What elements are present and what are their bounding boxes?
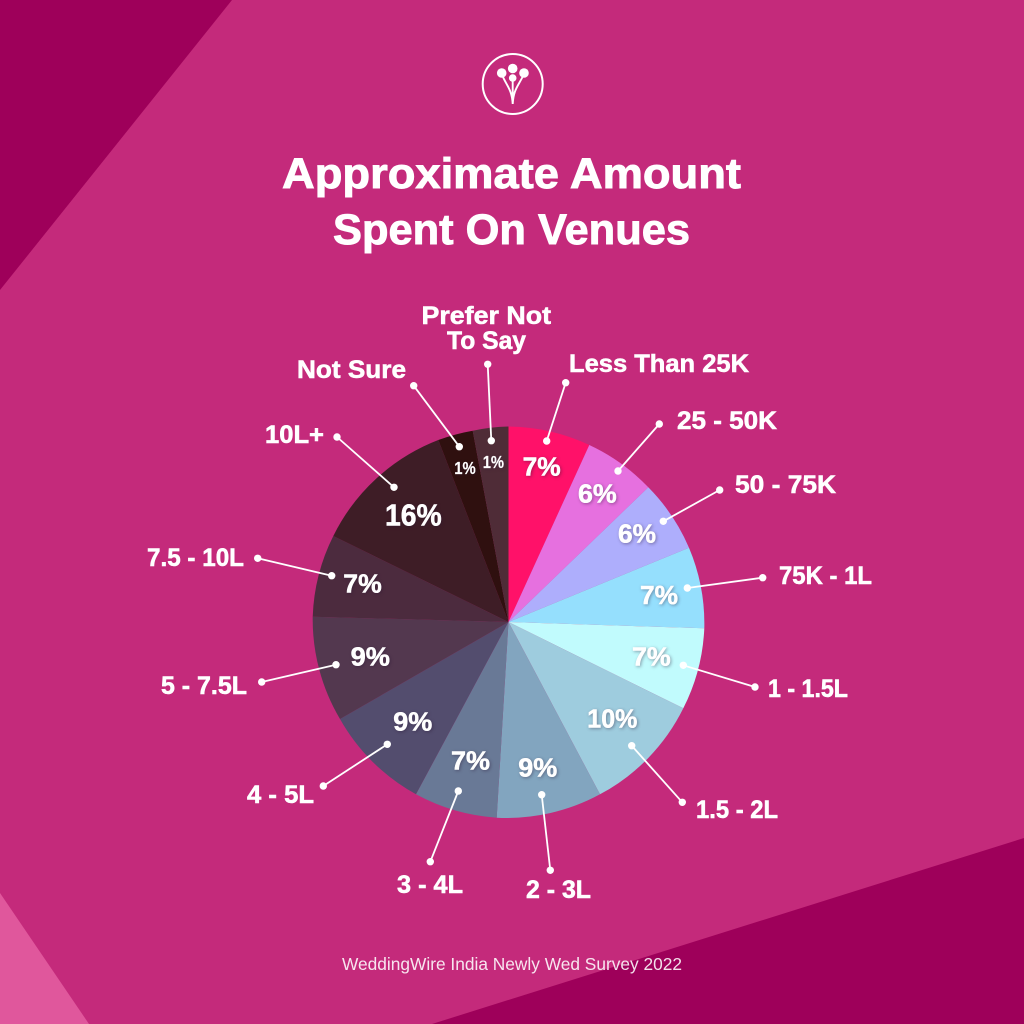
percent labels: 9%: [393, 707, 432, 737]
title: [282, 150, 741, 254]
callout: 50 - 75K: [660, 471, 836, 525]
percent labels: 16%: [385, 498, 442, 533]
percent labels: 6%: [578, 479, 617, 509]
callout: Prefer Not To Say: [422, 302, 552, 444]
slice: 4 - 5L: [340, 622, 508, 794]
percent labels: 1%: [483, 452, 504, 472]
callout: 50 - 75K: 50 - 75K: [735, 471, 836, 499]
percent labels: 7%: [632, 642, 671, 672]
callout: 5 - 7.5L: [161, 661, 340, 700]
callout: Prefer Not To Say: Prefer Not: [422, 302, 552, 330]
slice: Not Sure: [438, 431, 508, 622]
callout: 7.5 - 10L: [147, 544, 335, 579]
slice: 5 - 7.5L: [313, 617, 508, 719]
title: Approximate Amount: [282, 150, 741, 198]
percent labels: 6%: [618, 519, 656, 549]
callout: 4 - 5L: [247, 741, 391, 809]
callout: 1.5 - 2L: [628, 742, 778, 824]
callout: 4 - 5L: 4 - 5L: [247, 781, 314, 809]
title: Spent On Venues: [333, 206, 690, 254]
footer source text: WeddingWire India Newly Wed Survey 2022: [342, 954, 682, 974]
callout: Not Sure: Not Sure: [297, 356, 406, 384]
slice: 3 - 4L: [416, 622, 508, 818]
slice: 7.5 - 10L: [313, 536, 508, 622]
callout: 7.5 - 10L: 7.5 - 10L: [147, 544, 244, 572]
callout: Not Sure: [297, 356, 463, 450]
callout: 10L+: 10L+: [265, 421, 324, 449]
callout: 25 - 50K: 25 - 50K: [677, 407, 777, 435]
callout: Less Than 25K: [543, 350, 749, 445]
callout: 10L+: [265, 421, 398, 491]
callout: 75K - 1L: [684, 562, 872, 592]
background shape: top-left dark corner: [0, 0, 232, 290]
background shape: bottom-left light corner: [0, 893, 89, 1024]
slice: 25 - 50K: [508, 445, 648, 622]
slice: 50 - 75K: [508, 487, 689, 622]
percent labels: 9%: [518, 753, 557, 783]
callout: Prefer Not To Say: To Say: [447, 327, 526, 355]
callout: 5 - 7.5L: 5 - 7.5L: [161, 672, 247, 700]
callout: 3 - 4L: 3 - 4L: [397, 871, 463, 899]
slice: Less Than 25K: [508, 426, 589, 622]
percent labels: 7%: [451, 745, 490, 775]
callout: 2 - 3L: [526, 791, 591, 904]
percent labels: [343, 452, 678, 783]
percent labels: 10%: [587, 704, 637, 734]
callout: 1.5 - 2L: 1.5 - 2L: [696, 796, 778, 824]
callout: 1 - 1.5L: [680, 662, 848, 703]
callout: 1 - 1.5L: 1 - 1.5L: [768, 675, 848, 703]
callout: 3 - 4L: [397, 787, 463, 899]
percent labels: 7%: [640, 580, 678, 610]
slice: Prefer Not To Say: [473, 426, 508, 622]
slice: 75K - 1L: [508, 548, 704, 628]
callout: 2 - 3L: 2 - 3L: [526, 876, 591, 904]
percent labels: 7%: [343, 568, 382, 598]
slice: 1.5 - 2L: [508, 622, 683, 794]
percent labels: 9%: [351, 642, 390, 672]
percent labels: 7%: [523, 452, 561, 482]
icon: bouquet logo: [483, 54, 543, 114]
callout: 25 - 50K: [614, 407, 777, 475]
callout: Less Than 25K: Less Than 25K: [569, 350, 749, 378]
background shape: bottom-right dark corner: [432, 838, 1024, 1024]
slice: 1 - 1.5L: [508, 622, 704, 708]
slice: 10L+: [333, 440, 508, 622]
slice: 2 - 3L: [497, 622, 600, 818]
percent labels: 1%: [454, 458, 476, 478]
pie chart: [313, 426, 704, 818]
callout: 75K - 1L: 75K - 1L: [779, 562, 872, 590]
